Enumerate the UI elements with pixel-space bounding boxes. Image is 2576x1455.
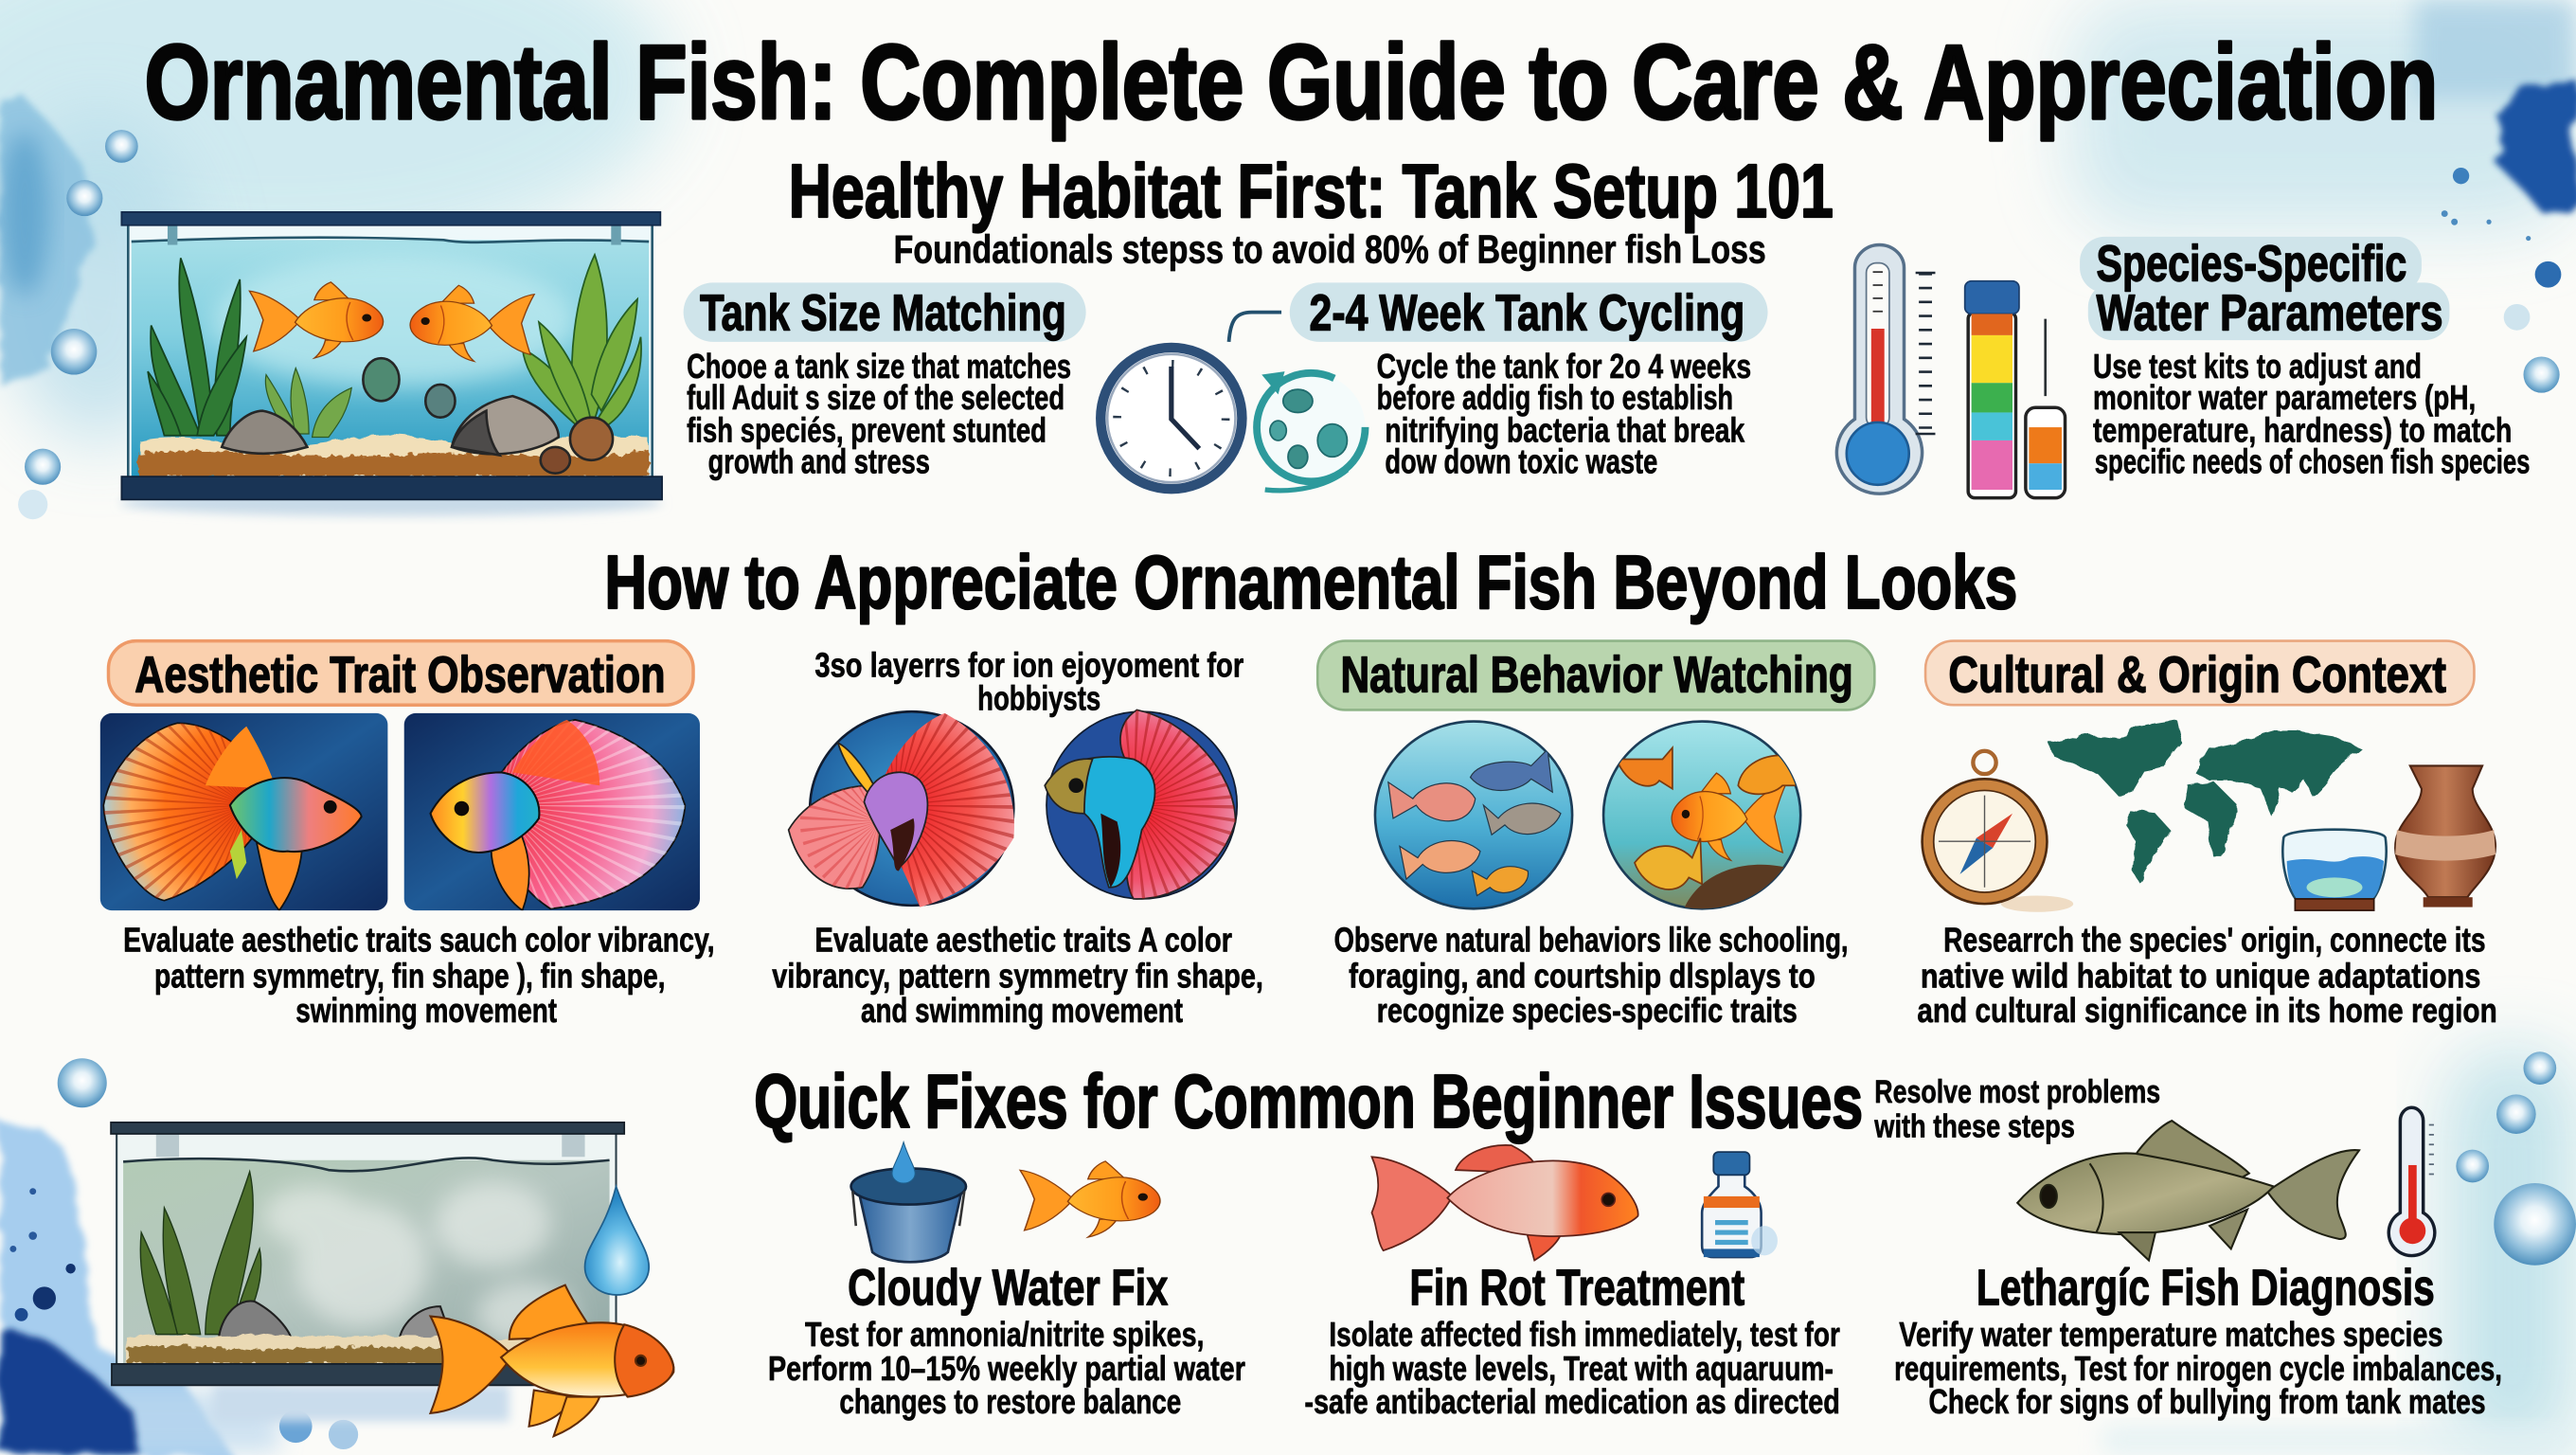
card: water parameters: Species-Specific [2096, 236, 2406, 293]
card: fin rot [1304, 1145, 1840, 1421]
body text: foraging, and courtship dlsplays to [1349, 957, 1816, 996]
card heading: Lethargíc Fish Diagnosis [1977, 1259, 2435, 1316]
painting: goldfish scene [1603, 722, 1807, 908]
rocks [222, 358, 613, 474]
icon: medicine bottle [1702, 1152, 1778, 1257]
icon: small goldfish [1020, 1161, 1160, 1237]
body text [2093, 347, 2530, 481]
side note [1874, 1074, 2160, 1144]
body text: high waste levels, Treat with aquaruum- [1329, 1349, 1834, 1388]
card: cultural context: Cultural & Origin Context [1948, 646, 2446, 703]
large goldfish [430, 1285, 673, 1436]
illustration: healthy aquarium [120, 212, 662, 516]
rocks [219, 1301, 452, 1344]
body text: nitrifying bacteria that break [1385, 411, 1745, 450]
note text [814, 646, 1243, 717]
card: aesthetic traits [100, 641, 715, 1030]
body text: Test for amnonia/nitrite spikes, [805, 1315, 1205, 1354]
card: natural behavior [1317, 641, 1874, 1030]
body text [687, 347, 1071, 481]
body text: vibrancy, pattern symmetry fin shape, [772, 957, 1263, 996]
note text: 3so layerrs for ion ejoyoment for [814, 646, 1243, 685]
icon: compass [1923, 751, 2073, 912]
body text: pattern symmetry, fin shape ), fin shape, [154, 957, 666, 996]
plant: small [265, 368, 351, 437]
card: tank cycling [1290, 282, 1768, 481]
body text [768, 1315, 1245, 1421]
card: water parameters [2080, 236, 2530, 481]
body text: Use test kits to adjust and [2093, 347, 2422, 386]
icon: fish bowl [2282, 830, 2387, 910]
section: quick fixes [111, 1059, 2502, 1436]
gravel [127, 1333, 559, 1364]
plant: right [523, 255, 641, 427]
label pill [2080, 237, 2449, 340]
body text: and swimming movement [861, 991, 1183, 1030]
body text [123, 920, 715, 1030]
card heading: Fin Rot Treatment [1409, 1259, 1744, 1316]
icon: water test tubes [1965, 281, 2066, 498]
body text: full Aduit s size of the selected [687, 378, 1064, 417]
card: cloudy water [768, 1142, 1245, 1421]
heading: quick fixes: Quick Fixes for Common Beginner Issues [754, 1059, 1863, 1143]
plant: left [148, 258, 246, 436]
icon: world map [2048, 720, 2361, 883]
card heading: Cloudy Water Fix [848, 1259, 1168, 1316]
card: lethargic fish [1894, 1107, 2502, 1421]
body text: native wild habitat to unique adaptations [1921, 957, 2480, 996]
painting: betta in oval [789, 711, 1014, 907]
painting: betta facing left [404, 710, 700, 910]
icon: red fish [1371, 1145, 1638, 1261]
label pill [1290, 282, 1768, 342]
icon: dull fish [2017, 1121, 2359, 1261]
label pill [108, 641, 693, 705]
body text: Evaluate aesthetic traits A color [814, 920, 1232, 959]
card: tank size [684, 282, 1086, 481]
note text: hobbiysts [977, 678, 1100, 717]
card: cultural context [1917, 641, 2497, 1030]
body text: before addig fish to establish [1377, 378, 1733, 417]
label pill [1317, 641, 1874, 710]
illustration: cloudy aquarium [111, 1123, 673, 1436]
side note: with these steps [1874, 1108, 2075, 1144]
body text: Perform 10–15% weekly partial water [768, 1349, 1245, 1388]
body text: Evaluate aesthetic traits sauch color vibrancy, [123, 920, 715, 959]
body text: dow down toxic waste [1385, 442, 1657, 481]
subheading: tank setup: Foundationals stepss to avoid 80% of Beginner fish Loss [894, 227, 1766, 272]
icon: clay vase [2395, 765, 2496, 907]
body text [1894, 1315, 2502, 1421]
plant [140, 1172, 261, 1335]
painting: betta facing right [100, 713, 387, 910]
card: water parameters: Water Parameters [2096, 285, 2442, 342]
card: tank size: Tank Size Matching [700, 285, 1066, 342]
body text: changes to restore balance [839, 1382, 1181, 1421]
icon: thermometer [1836, 245, 1935, 494]
painting: schooling fish [1375, 722, 1572, 908]
card: aesthetic traits: Aesthetic Trait Observation [134, 646, 666, 703]
heading: appreciation: How to Appreciate Ornamental Fish Beyond Looks [604, 540, 2017, 624]
card: layers of enjoyment [772, 646, 1263, 1030]
label pill [1925, 641, 2474, 705]
body text: -safe antibacterial medication as directed [1304, 1382, 1840, 1421]
icon: clock [1100, 348, 1242, 489]
body text [1917, 920, 2497, 1030]
body text [1377, 347, 1751, 481]
body text [1334, 920, 1849, 1030]
body text: swinming movement [295, 991, 557, 1030]
painting: betta facing left [1045, 710, 1237, 899]
icon: thermometer [2388, 1107, 2435, 1256]
label pill [684, 282, 1086, 342]
heading: tank setup: Healthy Habitat First: Tank Setup 101 [789, 149, 1834, 233]
body text [1304, 1315, 1840, 1421]
water drop [585, 1186, 649, 1295]
connector line [1229, 313, 1281, 342]
body text: fish speciés, prevent stunted [687, 411, 1046, 450]
goldfish pair [249, 282, 534, 361]
body text: Isolate affected fish immediately, test for [1329, 1315, 1840, 1354]
card: natural behavior: Natural Behavior Watching [1341, 646, 1853, 703]
body text: Cycle the tank for 2o 4 weeks [1377, 347, 1751, 386]
section: appreciation [100, 540, 2497, 1030]
side note: Resolve most problems [1874, 1074, 2160, 1110]
body text [772, 920, 1263, 1030]
body text: Observe natural behaviors like schooling, [1334, 920, 1849, 959]
icon: bucket and drop [851, 1142, 966, 1262]
body text: recognize species-specific traits [1377, 991, 1798, 1030]
body text: Chooe a tank size that matches [687, 347, 1071, 386]
card: tank cycling: 2-4 Week Tank Cycling [1310, 285, 1744, 342]
body text: Verify water temperature matches species [1899, 1315, 2442, 1354]
icon: bacteria cycle [1257, 371, 1366, 491]
body text: growth and stress [708, 442, 930, 481]
section: tank setup [120, 149, 2530, 516]
gravel [138, 435, 649, 476]
